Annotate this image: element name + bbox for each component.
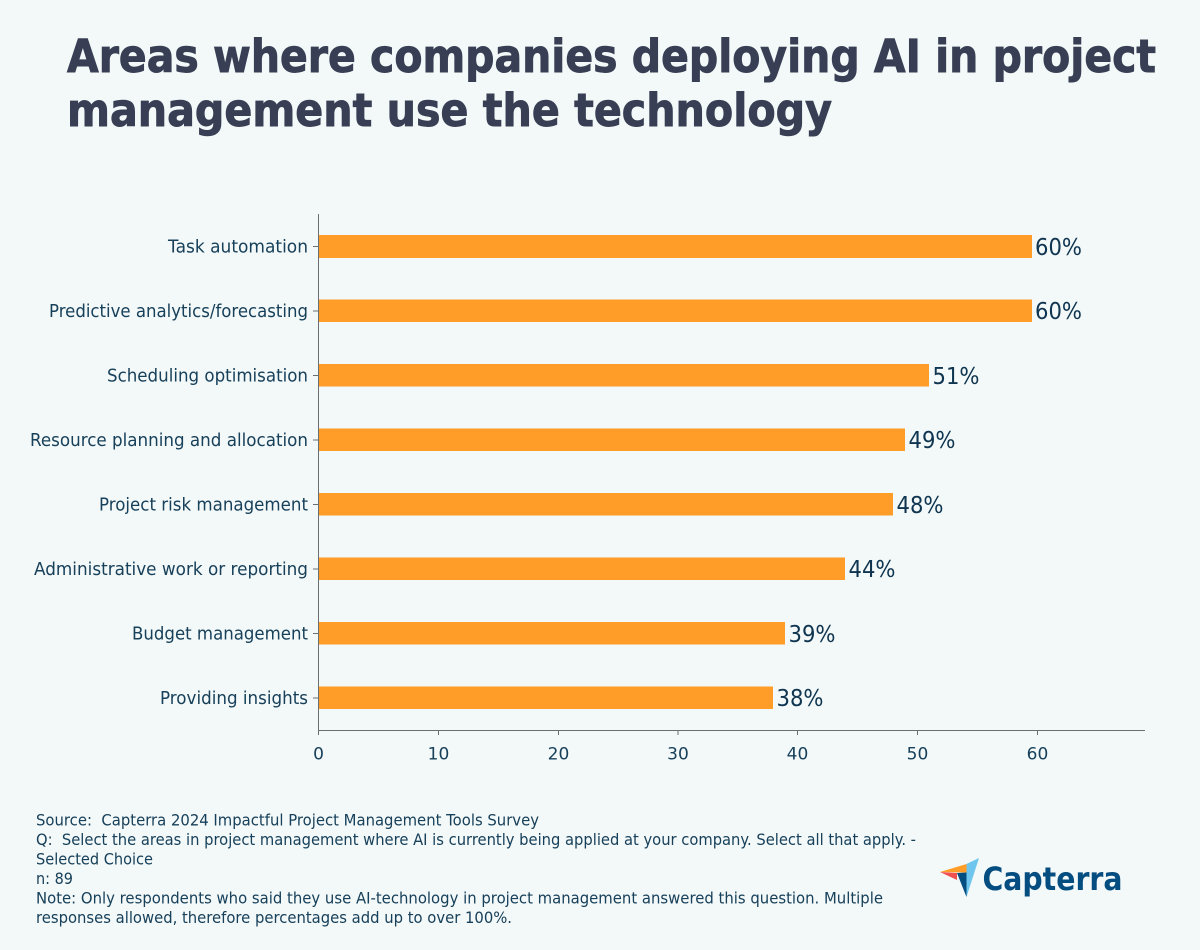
category labels: Providing insights xyxy=(160,688,308,709)
icon: paper plane xyxy=(940,858,979,897)
source notes: Selected Choice xyxy=(36,850,153,868)
source notes: n: 89 xyxy=(36,869,73,888)
x axis tick labels: 40 xyxy=(787,744,808,764)
category labels: Predictive analytics/forecasting xyxy=(49,301,308,322)
value labels: 60% xyxy=(1035,299,1082,325)
source notes: Source: Capterra 2024 Impactful Project Management Tools Survey xyxy=(36,810,539,830)
source notes xyxy=(36,810,916,927)
bars xyxy=(318,235,1032,709)
bar chart xyxy=(30,214,1145,764)
category labels: Administrative work or reporting xyxy=(34,559,308,580)
value labels: 38% xyxy=(776,686,824,712)
title: management use the technology xyxy=(67,84,832,137)
title xyxy=(67,30,1156,137)
value labels: 48% xyxy=(896,493,944,519)
category labels: Budget management xyxy=(132,624,308,644)
logo wordmark: Capterra xyxy=(982,860,1122,898)
logo: Capterra xyxy=(940,858,1122,898)
x axis tick labels: 50 xyxy=(907,744,928,764)
x axis tick labels: 10 xyxy=(428,744,449,764)
source notes: responses allowed, therefore percentages add up to over 100%. xyxy=(36,908,512,927)
x axis tick labels: 0 xyxy=(313,744,324,764)
category labels: Project risk management xyxy=(99,494,308,516)
value labels: 51% xyxy=(932,364,980,390)
category labels: Task automation xyxy=(167,236,308,258)
source notes: Note: Only respondents who said they use AI-technology in project management answered this question. Multiple xyxy=(36,888,883,908)
value labels: 44% xyxy=(848,557,896,583)
source notes: Q: Select the areas in project management where AI is currently being applied at your company. Select all that apply. - xyxy=(36,830,916,849)
value labels: 39% xyxy=(788,622,836,648)
x axis tick labels: 20 xyxy=(548,744,569,764)
x axis tick labels: 30 xyxy=(667,744,689,764)
x axis tick labels: 60 xyxy=(1027,744,1048,764)
axes xyxy=(313,214,1145,735)
x axis tick labels xyxy=(313,744,1048,764)
value labels: 60% xyxy=(1035,235,1082,261)
value labels xyxy=(776,235,1082,712)
category labels xyxy=(30,236,308,709)
value labels: 49% xyxy=(908,428,956,454)
category labels: Scheduling optimisation xyxy=(107,366,308,386)
category labels: Resource planning and allocation xyxy=(30,430,308,451)
